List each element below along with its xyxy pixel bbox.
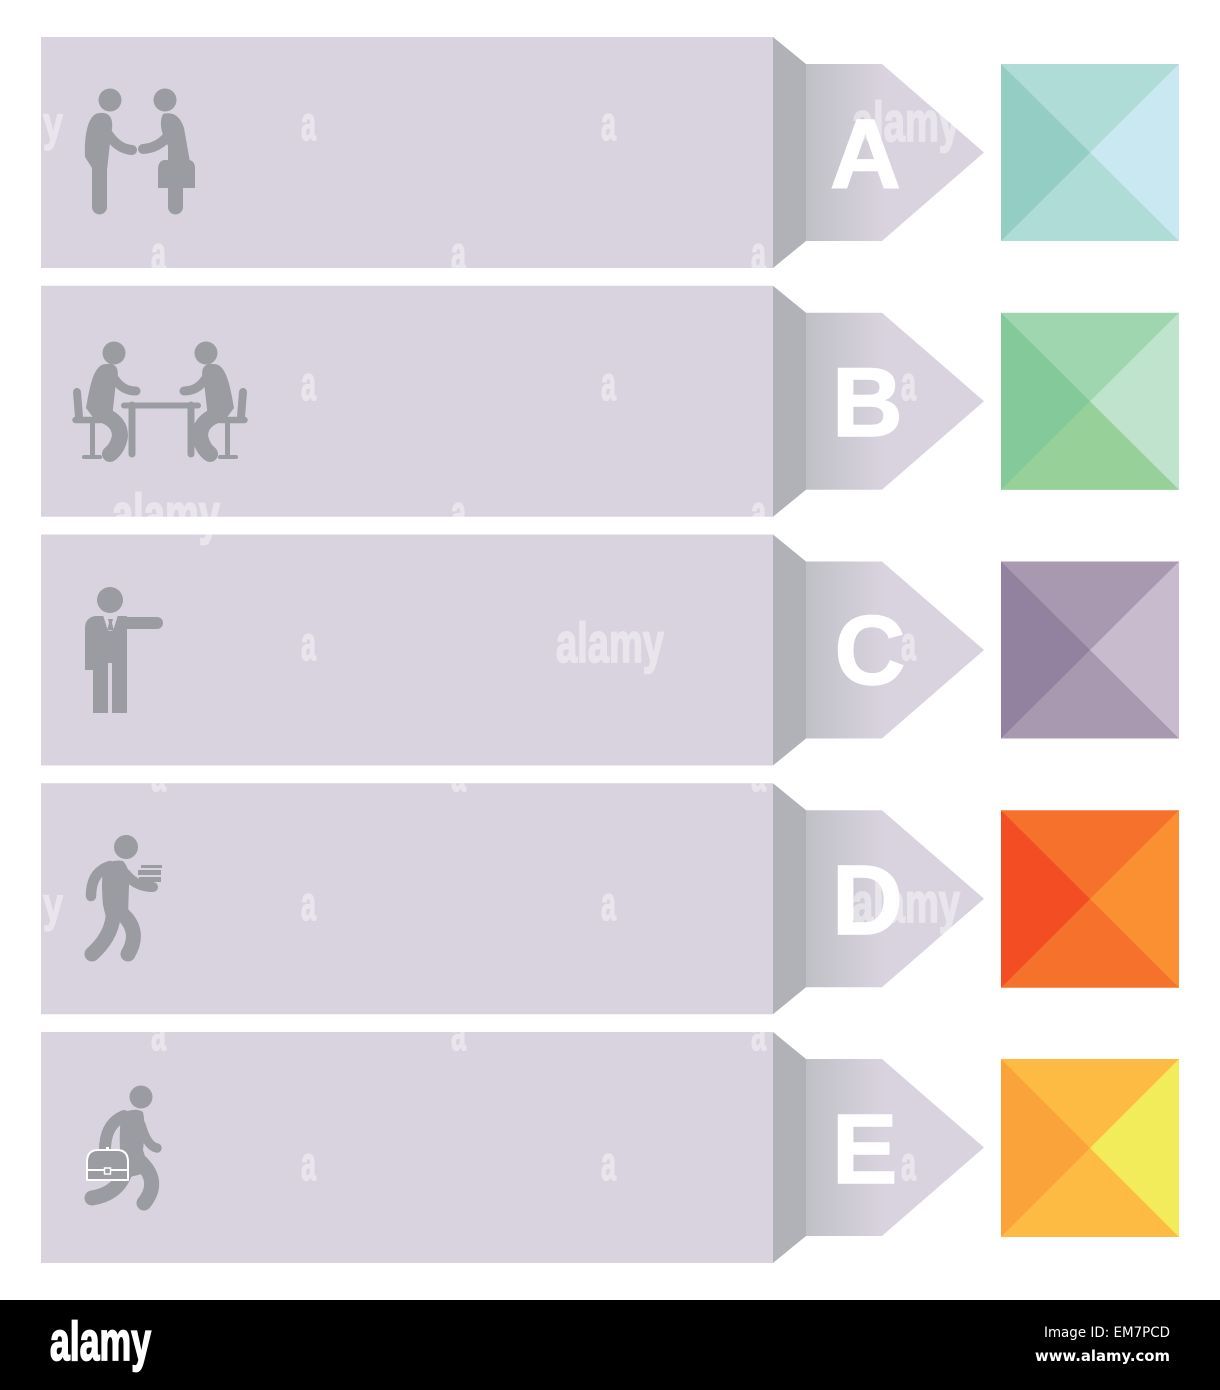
- footer bar: [0, 1300, 1220, 1390]
- footer logo: alamy: [50, 1310, 151, 1372]
- website: www.alamy.com: [1035, 1347, 1170, 1365]
- panel: row A: [41, 37, 984, 268]
- watermarks: a: [751, 1008, 766, 1061]
- watermarks: a: [451, 749, 466, 802]
- square: teal: [1001, 64, 1179, 241]
- watermarks: a: [601, 1138, 616, 1191]
- icon: man carrying books: [91, 835, 162, 954]
- letter D: D: [832, 845, 903, 955]
- panel: row D: [41, 783, 984, 1014]
- watermarks: a: [301, 878, 316, 931]
- watermarks: a: [301, 1138, 316, 1191]
- watermarks: a: [301, 618, 316, 671]
- panel: row B: [41, 286, 984, 517]
- watermarks: a: [451, 228, 466, 281]
- square: purple: [1001, 562, 1179, 738]
- letter C: C: [834, 595, 905, 705]
- letter B: B: [832, 347, 903, 457]
- watermarks: a: [301, 98, 316, 151]
- watermarks: a: [601, 358, 616, 411]
- watermarks: a: [451, 487, 466, 540]
- watermarks: [43, 90, 960, 1191]
- watermarks: a: [751, 487, 766, 540]
- watermarks: a: [301, 358, 316, 411]
- watermarks: a: [751, 749, 766, 802]
- watermarks: y: [43, 879, 63, 932]
- watermarks: alamy: [112, 482, 220, 545]
- icon: man pointing: [85, 587, 163, 713]
- watermarks: a: [151, 1008, 166, 1061]
- square: orange: [1001, 810, 1179, 988]
- panel: row E: [41, 1032, 984, 1263]
- image id: Image ID: EM7PCD: [1044, 1325, 1170, 1341]
- watermarks: a: [751, 228, 766, 281]
- square: yellow: [1001, 1059, 1179, 1237]
- icon: man with briefcase: [87, 1086, 157, 1203]
- panel: row C: [41, 534, 984, 766]
- watermarks: a: [601, 878, 616, 931]
- square: green: [1001, 313, 1179, 490]
- icon: meeting at table: [76, 342, 244, 457]
- watermarks: a: [601, 98, 616, 151]
- letter E: E: [832, 1094, 897, 1204]
- watermarks: a: [151, 228, 166, 281]
- watermarks: y: [43, 98, 63, 151]
- icon: handshake: [85, 88, 195, 207]
- letter A: A: [830, 99, 901, 209]
- watermarks: a: [151, 749, 166, 802]
- watermarks: alamy: [556, 611, 664, 674]
- watermarks: a: [451, 1008, 466, 1061]
